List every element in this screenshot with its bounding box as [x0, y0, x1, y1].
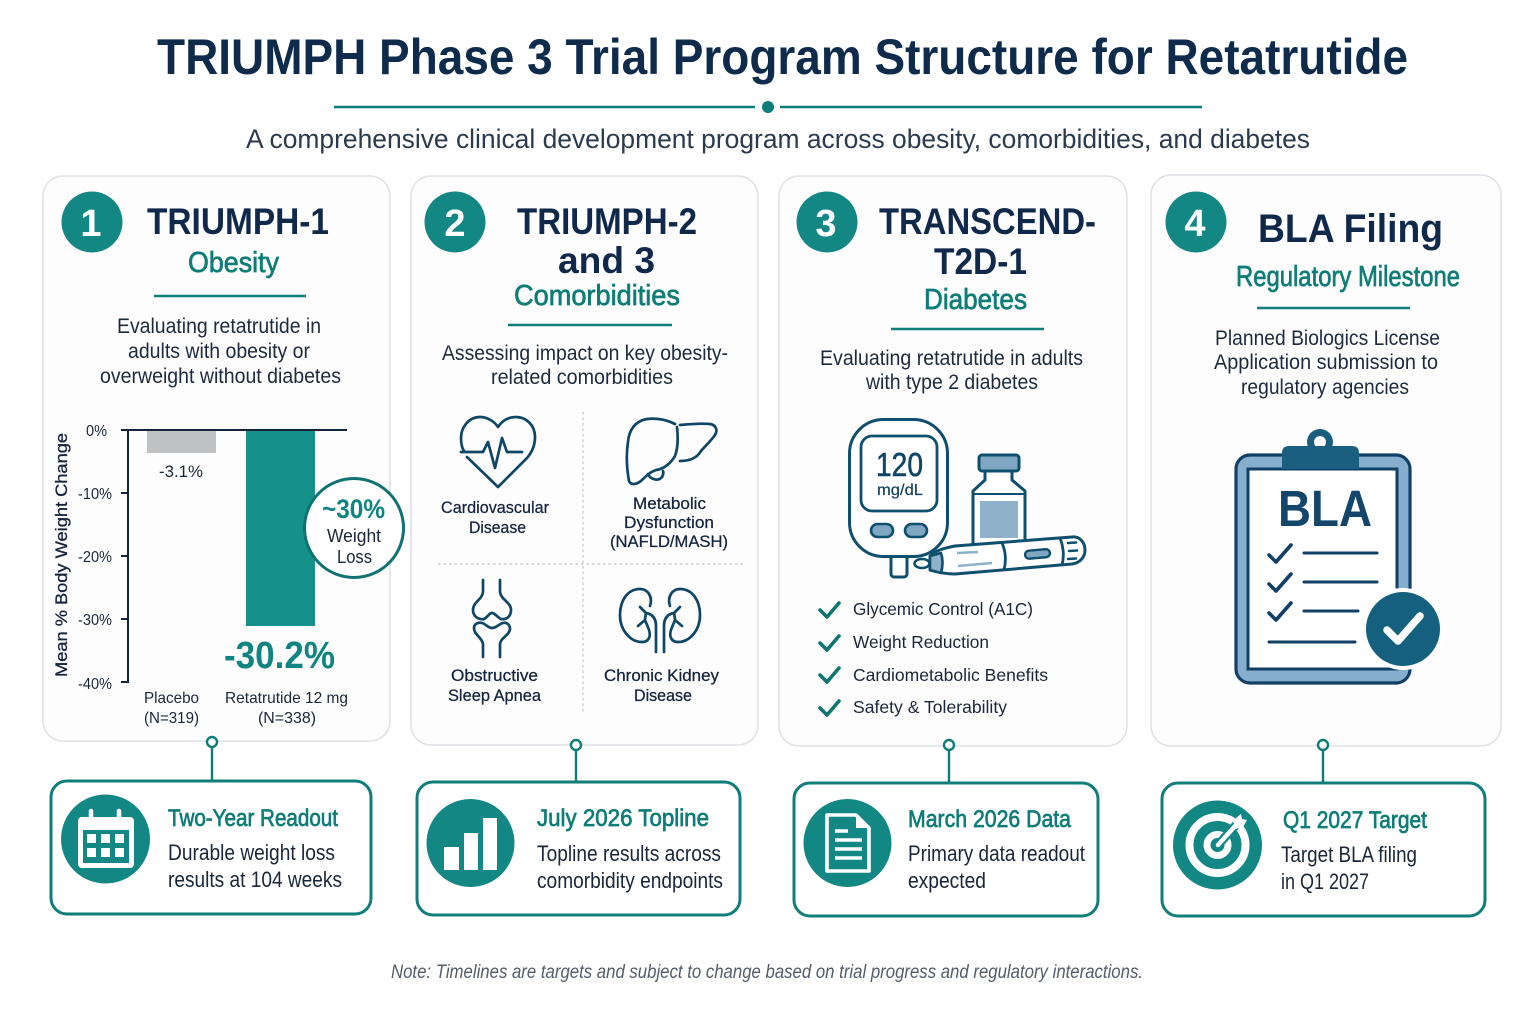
subheading: Comorbidities: Comorbidities [514, 280, 680, 312]
title: TRIUMPH Phase 3 Trial Program Structure for Retatrutide [157, 29, 1408, 85]
number badge 3: 3 [815, 203, 837, 245]
icon: target with arrow [1173, 800, 1262, 890]
connector 3 [944, 740, 954, 783]
label: chronic kidney disease: Chronic Kidney [604, 667, 720, 685]
label: cardiovascular disease: Cardiovascular [441, 499, 549, 517]
callout: ~30% weight loss [304, 478, 404, 578]
milestone: march 2026 data [794, 783, 1098, 916]
number badge 1 [62, 192, 122, 252]
icon: injection pen [914, 537, 1085, 574]
heading: TRIUMPH-2 and 3 [517, 201, 697, 281]
description: with type 2 diabetes [865, 371, 1038, 394]
label: metabolic dysfunction: (NAFLD/MASH) [610, 533, 728, 551]
subheading: Regulatory Milestone: Regulatory Milestone [1236, 261, 1460, 293]
connector 2 [571, 740, 581, 782]
item: cardiometabolic benefits: Cardiometabolic Benefits [853, 665, 1048, 685]
icon: bar chart [426, 799, 514, 887]
title divider [334, 101, 1202, 113]
bar chart: mean body weight change [52, 423, 404, 727]
label: metabolic dysfunction [610, 495, 728, 551]
retatrutide bar [246, 431, 315, 626]
description: Evaluating retatrutide in adults [820, 347, 1083, 370]
number badge 3 [796, 192, 858, 252]
heading: TRANSCEND-T2D-1: TRANSCEND- [879, 201, 1096, 242]
number badge 1: 1 [80, 203, 102, 245]
icon: vial [973, 455, 1025, 546]
connector 4 [1318, 740, 1328, 783]
label: obstructive sleep apnea: Obstructive [451, 667, 538, 685]
connector 1 [207, 737, 217, 780]
label: obstructive sleep apnea: Sleep Apnea [448, 687, 542, 705]
heading: TRANSCEND-T2D-1: T2D-1 [934, 241, 1027, 282]
label: obstructive sleep apnea [448, 667, 542, 705]
milestone text [1281, 807, 1427, 894]
footnote: Note: Timelines are targets and subject to change based on trial progress and regulatory interactions. [391, 962, 1143, 983]
description: regulatory agencies [1241, 376, 1409, 399]
milestone: q1 2027 target [1162, 783, 1485, 916]
label: cardiovascular disease: Disease [469, 519, 526, 537]
icon: joint [473, 580, 511, 657]
description [820, 347, 1083, 394]
tick labels: 0% [86, 423, 107, 440]
panel: BLA Filing [1151, 175, 1501, 746]
placebo label [144, 690, 199, 727]
milestone text: Q1 2027 Target [1283, 807, 1427, 834]
number badge 2: 2 [444, 203, 466, 245]
description: adults with obesity or [128, 340, 310, 363]
tick labels: -30% [78, 612, 112, 629]
icon: calendar [61, 794, 150, 884]
tick labels [78, 423, 112, 693]
subheading: Obesity: Obesity [188, 247, 279, 279]
milestone text: Topline results across [537, 841, 721, 866]
subheading: Diabetes: Diabetes [924, 284, 1027, 316]
milestone text: Primary data readout [908, 841, 1085, 866]
label: metabolic dysfunction: Metabolic [633, 495, 706, 513]
milestone text [537, 805, 723, 893]
heading: TRIUMPH-2 and 3: TRIUMPH-2 [517, 201, 697, 242]
tick labels: -20% [78, 549, 112, 566]
checklist [820, 599, 1048, 717]
callout: ~30% weight loss: ~30% [322, 494, 385, 524]
description: Evaluating retatrutide in [117, 315, 321, 338]
milestone text: Target BLA filing [1281, 842, 1417, 867]
retatrutide label: Retatrutide 12 mg [225, 690, 348, 707]
retatrutide value: -30.2% [224, 635, 335, 677]
milestone text: comorbidity endpoints [537, 868, 723, 893]
milestone: july 2026 topline [417, 782, 740, 915]
icon: kidneys [620, 589, 700, 652]
label: chronic kidney disease [604, 667, 720, 705]
item: glycemic control: Glycemic Control (A1C) [853, 599, 1033, 619]
placebo value: -3.1% [159, 462, 203, 481]
number badge 4: 4 [1184, 203, 1206, 245]
panel: TRANSCEND-T2D-1 [779, 176, 1127, 746]
label: cardiovascular disease [441, 499, 549, 537]
description [100, 315, 341, 388]
icon: document [804, 799, 892, 887]
tick labels: -10% [78, 486, 112, 503]
icon: liver [627, 419, 716, 484]
milestone text: Two-Year Readout [168, 805, 338, 832]
heading: TRIUMPH-2 and 3: and 3 [558, 240, 655, 281]
milestone text: March 2026 Data [908, 806, 1072, 833]
description: Application submission to [1214, 351, 1438, 374]
panel: TRIUMPH-1 [43, 176, 404, 741]
icon: glucose meter: mg/dL [877, 482, 923, 499]
placebo bar [147, 431, 216, 453]
label: metabolic dysfunction: Dysfunction [624, 514, 714, 532]
heading: TRANSCEND-T2D-1 [879, 201, 1096, 282]
description: Assessing impact on key obesity- [442, 342, 728, 365]
number badge 2 [424, 192, 486, 252]
milestone text: expected [908, 868, 986, 893]
description [442, 342, 728, 389]
subtitle: A comprehensive clinical development program across obesity, comorbidities, and diabetes [246, 124, 1310, 154]
icon: heart with pulse [461, 417, 535, 487]
placebo label: Placebo [144, 690, 199, 707]
milestone text [168, 805, 342, 892]
icon: BLA clipboard [1236, 429, 1444, 683]
description: related comorbidities [491, 366, 673, 389]
description [1214, 327, 1440, 399]
number badge 4 [1166, 192, 1226, 252]
milestone text [908, 806, 1085, 893]
milestone text: July 2026 Topline [537, 805, 709, 832]
axes [121, 430, 347, 682]
description: Planned Biologics License [1215, 327, 1440, 350]
icon: BLA clipboard: BLA [1278, 480, 1372, 537]
description: overweight without diabetes [100, 365, 341, 388]
retatrutide label: (N=338) [258, 710, 316, 727]
milestone text: in Q1 2027 [1281, 869, 1369, 894]
callout: ~30% weight loss: Weight [327, 526, 381, 546]
label: chronic kidney disease: Disease [634, 687, 692, 705]
tick labels: -40% [78, 676, 112, 693]
retatrutide label [225, 690, 348, 727]
callout: ~30% weight loss: Loss [337, 547, 372, 567]
item: safety and tolerability: Safety & Tolerability [853, 697, 1007, 717]
milestone: two-year readout [51, 781, 371, 914]
milestone text: Durable weight loss [168, 840, 335, 865]
icon: glucose meter [850, 420, 948, 577]
heading: TRIUMPH-1: TRIUMPH-1 [147, 201, 329, 242]
item: weight reduction: Weight Reduction [853, 632, 989, 652]
panel: TRIUMPH-2 and 3 [411, 176, 758, 745]
y axis title: Mean % Body Weight Change [52, 433, 71, 677]
heading: BLA Filing: BLA Filing [1258, 207, 1443, 251]
icon: glucose meter: 120 [876, 446, 923, 483]
milestone text: results at 104 weeks [168, 867, 342, 892]
placebo label: (N=319) [144, 710, 199, 727]
